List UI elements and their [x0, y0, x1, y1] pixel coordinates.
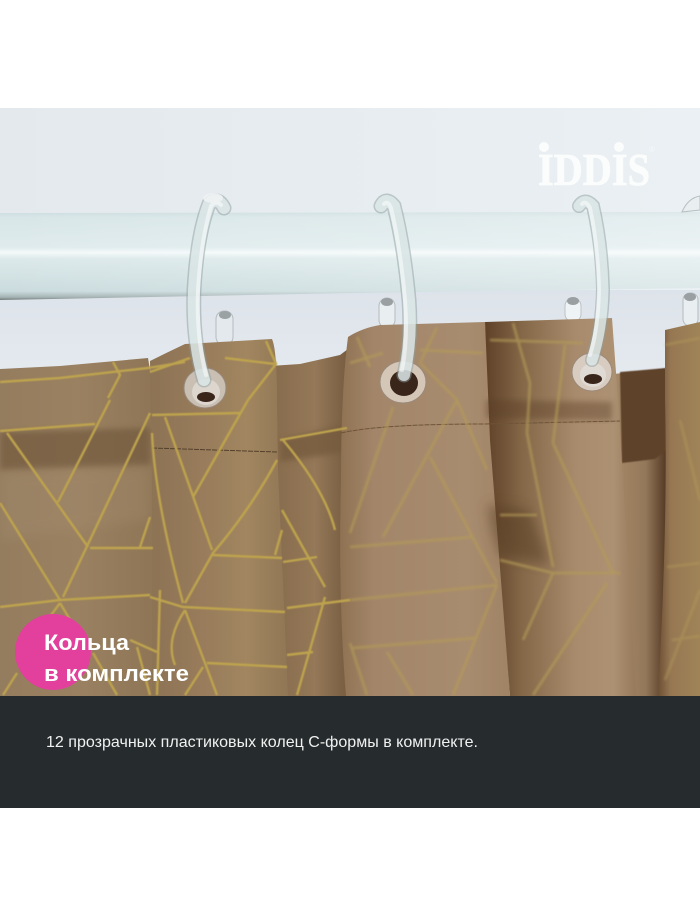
curtain panel: fold front left [150, 339, 288, 696]
curtain panel: fold front centre right [485, 318, 636, 696]
curtain panel: fold far right [658, 322, 700, 696]
ring ends behind the rod [216, 293, 698, 345]
heading: rings included [44, 630, 189, 686]
photo: shower curtain on rod [0, 108, 700, 696]
heading: rings included: Кольца [44, 630, 130, 655]
grommet [184, 368, 226, 408]
hem shadow on left panel [0, 425, 345, 470]
caption text: 12 прозрачных пластиковых колец С-формы в комплекте. [46, 734, 478, 751]
dark patch on centre right panel [488, 505, 550, 565]
ring 2 with grommet [380, 201, 426, 403]
ring 1 with grommet [184, 193, 226, 408]
ring 4 partly cropped [682, 196, 700, 212]
ring 3 with grommet [572, 202, 612, 391]
wall background [0, 108, 700, 290]
dark shadow on back right panel [620, 368, 667, 463]
grommet [380, 361, 426, 403]
curtain panel: fold front centre [340, 322, 510, 696]
stitching lines [152, 421, 620, 452]
badge: pink circle [15, 614, 91, 690]
curtain panel: back right [616, 368, 666, 696]
curtain panel: back left [0, 358, 155, 696]
lighter fabric strip below hem on left panel [136, 479, 138, 512]
panel: dark caption band [0, 696, 700, 808]
rod [0, 212, 700, 300]
logo: IDDIS: IDDIS [538, 144, 650, 195]
curtain panel: back centre [276, 350, 346, 696]
grommet [572, 353, 612, 391]
logo: IDDIS: ® [649, 145, 655, 154]
geometric pattern: left panels [0, 341, 350, 695]
geometric pattern: centre and right panels [350, 323, 700, 695]
wall below rod [202, 290, 700, 347]
heading: rings included: в комплекте [44, 661, 189, 686]
